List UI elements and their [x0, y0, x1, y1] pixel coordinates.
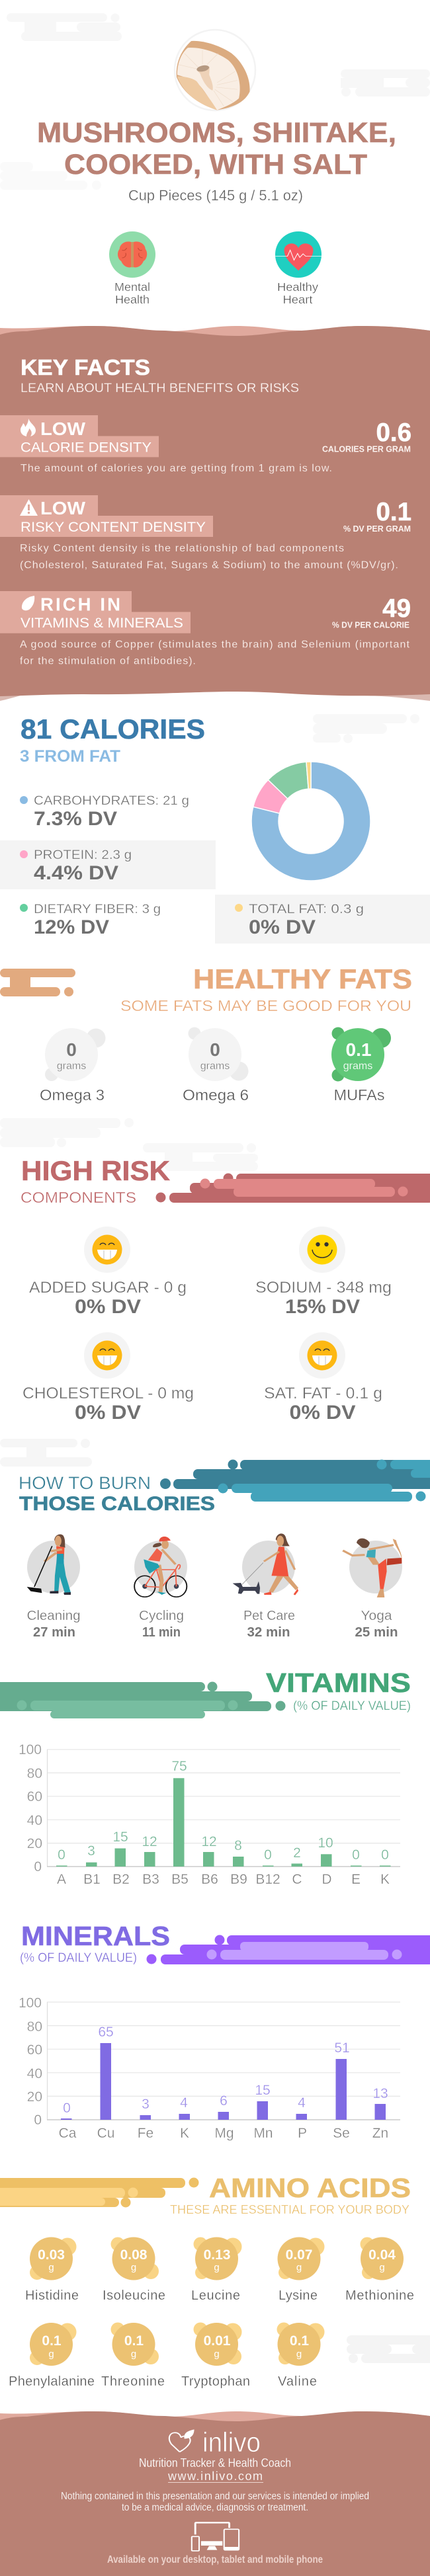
amino: phenylalanine: 0.1	[42, 2333, 62, 2349]
burn calories heading	[19, 1473, 215, 1515]
fact: risky content density: 0.1	[376, 498, 411, 526]
figure: person sweeping	[27, 1535, 71, 1595]
amino: histidine: 0.03	[38, 2247, 65, 2263]
bar chart: vitamins: B9	[230, 1872, 247, 1887]
fact: calorie density: CALORIE DENSITY	[21, 440, 151, 455]
risk: sodium: SODIUM - 348 mg	[255, 1279, 392, 1297]
activity: yoga	[343, 1539, 402, 1640]
icon: grinning face	[93, 1235, 122, 1264]
fat: omega 6	[183, 1027, 249, 1104]
minerals subheading: (% OF DAILY VALUE)	[20, 1951, 137, 1965]
bar chart: minerals	[19, 1995, 400, 2141]
decorative cloud: healthy fats	[0, 969, 75, 996]
bar chart: minerals: Zn	[372, 2126, 388, 2141]
risk: saturated fat: SAT. FAT - 0.1 g	[264, 1385, 382, 1402]
activity: pet care	[233, 1533, 298, 1640]
fat: omega 6: grams	[200, 1061, 230, 1072]
bar chart: minerals: 40	[27, 2066, 42, 2081]
amino: leucine: g	[214, 2262, 220, 2273]
icon: grinning face	[93, 1341, 122, 1370]
fat: omega 3: grams	[57, 1061, 86, 1072]
amino: valine	[277, 2322, 324, 2389]
logo: inlivo: inlivo	[202, 2427, 261, 2458]
bar chart: vitamins: D	[322, 1872, 332, 1887]
activity: cycling	[134, 1537, 187, 1640]
key facts subheading: LEARN ABOUT HEALTH BENEFITS OR RISKS	[21, 382, 299, 395]
amino: histidine: Histidine	[25, 2288, 79, 2303]
amino: isoleucine: 0.08	[120, 2247, 148, 2263]
activity: pet care: Pet Care	[243, 1609, 295, 1623]
amino: leucine: 0.13	[204, 2247, 230, 2263]
amino: phenylalanine: Phenylalanine	[9, 2374, 95, 2389]
macro: protein: 4.4% DV	[34, 862, 118, 884]
disclaimer: Nothing contained in this presentation and our services is intended or implied	[61, 2491, 369, 2502]
fat: omega 3: Omega 3	[40, 1086, 105, 1104]
amino: histidine	[25, 2237, 79, 2303]
amino: lysine	[278, 2237, 324, 2303]
bar chart: vitamins: 20	[27, 1836, 42, 1851]
amino: lysine: Lysine	[279, 2288, 318, 2303]
icon: leaf	[22, 596, 34, 610]
amino: valine: Valine	[278, 2374, 317, 2389]
bar chart: minerals: P	[298, 2126, 307, 2141]
amino acids subheading: THESE ARE ESSENTIAL FOR YOUR BODY	[170, 2203, 409, 2216]
legend band backgrounds	[0, 840, 430, 944]
amino: leucine	[191, 2237, 242, 2303]
risk: sodium	[255, 1227, 392, 1318]
fat: mufas	[331, 1027, 391, 1104]
risk: cholesterol: CHOLESTEROL - 0 mg	[22, 1385, 194, 1402]
fact: risky content density: % DV PER GRAM	[343, 524, 411, 534]
fact: rich in vitamins and minerals: A good source of Copper (stimulates the brain) and Selenium (important	[20, 639, 410, 651]
fact: risky content density	[0, 495, 411, 571]
bar chart: minerals: Ca	[59, 2126, 77, 2141]
amino: phenylalanine	[9, 2323, 95, 2389]
bar chart: vitamins: B5	[171, 1872, 189, 1887]
fact: risky content density: Risky Content density is the relationship of bad components	[20, 543, 344, 554]
amino: methionine: g	[379, 2262, 385, 2273]
activity: cleaning: 27 min	[33, 1625, 75, 1640]
activity: yoga: 25 min	[355, 1625, 398, 1640]
fact: rich in vitamins and minerals: RICH IN	[40, 594, 120, 615]
vitamins subheading: (% OF DAILY VALUE)	[293, 1699, 411, 1713]
panel: footer	[0, 2411, 430, 2576]
amino: lysine: 0.07	[286, 2247, 312, 2263]
vitamins heading: VITAMINS	[266, 1668, 411, 1698]
bar chart: vitamins: 75	[171, 1759, 187, 1774]
label: mental health: Mental	[114, 280, 150, 294]
amino: leucine: Leucine	[191, 2288, 240, 2303]
macro: total fat: 0% DV	[249, 916, 316, 938]
healthy fats subheading: SOME FATS MAY BE GOOD FOR YOU	[120, 997, 411, 1014]
tagline: Nutrition Tracker & Health Coach	[139, 2456, 291, 2470]
macro: dietary fiber: DIETARY FIBER: 3 g	[34, 902, 161, 916]
bar chart: vitamins: 0	[264, 1847, 272, 1863]
bar chart: vitamins: 0	[352, 1847, 360, 1863]
bar chart: minerals: 51	[334, 2040, 350, 2056]
icon: smiling face	[307, 1235, 337, 1264]
food photo: shiitake mushroom	[175, 30, 255, 110]
bar chart: vitamins: 100	[19, 1742, 42, 1757]
amino: isoleucine: Isoleucine	[103, 2288, 165, 2303]
amino: tryptophan: g	[214, 2349, 220, 2360]
activity: cycling: Cycling	[139, 1609, 184, 1623]
macro: protein	[20, 848, 132, 884]
bar chart: vitamins: A	[57, 1872, 66, 1887]
bar chart: minerals: 0	[34, 2113, 42, 2128]
fat: mufas: grams	[343, 1061, 372, 1072]
amino: threonine: Threonine	[101, 2374, 165, 2389]
bar chart: vitamins: K	[380, 1872, 390, 1887]
bar chart: vitamins: E	[351, 1872, 361, 1887]
bar chart: vitamins: 80	[27, 1766, 42, 1781]
macro: carbohydrates: 7.3% DV	[34, 808, 117, 830]
donut chart: calorie sources	[251, 762, 370, 881]
bar chart: vitamins: 10	[318, 1835, 333, 1851]
panel: key facts	[0, 326, 430, 701]
amino: phenylalanine: g	[48, 2349, 54, 2360]
amino: tryptophan	[181, 2322, 250, 2389]
activity: cycling: 11 min	[142, 1625, 181, 1640]
figure: person in dancer pose	[343, 1539, 402, 1597]
bar chart: minerals: 13	[372, 2086, 388, 2101]
bar chart: vitamins	[19, 1742, 400, 1887]
icon: devices	[192, 2522, 239, 2551]
macro: dietary fiber	[20, 902, 161, 938]
macro: protein: PROTEIN: 2.3 g	[34, 848, 132, 862]
risk: cholesterol: 0% DV	[75, 1402, 141, 1424]
bar chart: minerals: 100	[19, 1995, 42, 2011]
risk: sodium: 15% DV	[285, 1296, 360, 1318]
bar chart: minerals: 4	[298, 2095, 306, 2111]
availability note: Available on your desktop, tablet and mobile phone	[107, 2554, 323, 2565]
amino: isoleucine: g	[131, 2262, 136, 2273]
amino: threonine: 0.1	[124, 2333, 144, 2349]
fat: mufas: MUFAs	[333, 1086, 385, 1104]
fact: rich in vitamins and minerals: VITAMINS & MINERALS	[21, 616, 183, 631]
macro: carbohydrates	[20, 793, 189, 830]
bar chart: minerals: Mn	[253, 2126, 273, 2141]
risk: saturated fat: 0% DV	[290, 1402, 356, 1424]
decorative cloud: amino acids	[0, 2178, 198, 2207]
bar chart: vitamins: 0	[34, 1859, 42, 1874]
amino: valine: 0.1	[290, 2333, 309, 2349]
title: COOKED, WITH SALT	[64, 149, 367, 181]
burn calories heading: THOSE CALORIES	[19, 1493, 215, 1515]
bar chart: vitamins: 15	[112, 1830, 128, 1845]
fact: rich in vitamins and minerals: 49	[382, 594, 411, 623]
label: mental health: Health	[115, 293, 150, 306]
decorative cloud: vitamins	[0, 1682, 286, 1718]
burn calories heading: HOW TO BURN	[19, 1473, 151, 1493]
icon: healthy heart	[275, 231, 322, 278]
bar chart: vitamins: C	[292, 1872, 302, 1887]
fact: rich in vitamins and minerals: % DV PER CALORIE	[332, 620, 409, 629]
icon: grinning face	[307, 1341, 337, 1370]
calories heading: 81 CALORIES	[21, 713, 205, 745]
decorative cloud: minerals	[147, 1935, 430, 1964]
amino: threonine	[101, 2322, 165, 2389]
title	[37, 117, 396, 181]
macro: dietary fiber: 12% DV	[34, 916, 109, 938]
amino: tryptophan: 0.01	[204, 2333, 231, 2349]
bar chart: vitamins: 0	[381, 1847, 389, 1863]
amino: threonine: g	[131, 2349, 136, 2360]
bar chart: vitamins: B3	[142, 1872, 159, 1887]
bar chart: minerals: 80	[27, 2019, 42, 2034]
macro: total fat	[235, 902, 364, 938]
fact: calorie density: The amount of calories you are getting from 1 gram is low.	[21, 463, 332, 474]
bar chart: vitamins: B1	[83, 1872, 101, 1887]
fat: omega 3	[40, 1028, 106, 1104]
activity: pet care: 32 min	[247, 1625, 290, 1640]
bar chart: vitamins: 12	[142, 1834, 157, 1849]
serving size: Cup Pieces (145 g / 5.1 oz)	[128, 187, 303, 204]
label: mental health	[114, 280, 150, 306]
figure: person walking dog	[233, 1533, 298, 1595]
fat: mufas: 0.1	[346, 1039, 371, 1060]
activity: cleaning: Cleaning	[26, 1609, 81, 1623]
healthy fats heading: HEALTHY FATS	[193, 963, 412, 994]
bar chart: minerals: 6	[220, 2093, 228, 2109]
fact: risky content density: (Cholesterol, Saturated Fat, Sugars & Sodium) to the amount (%DV/gr).	[20, 559, 398, 571]
amino: valine: g	[296, 2349, 302, 2360]
fact: calorie density: LOW	[40, 419, 85, 439]
icon: flame	[21, 419, 36, 436]
amino: methionine: Methionine	[345, 2288, 414, 2303]
minerals heading: MINERALS	[21, 1921, 170, 1951]
bar chart: vitamins: 8	[234, 1838, 242, 1853]
bar chart: vitamins: 3	[87, 1843, 95, 1859]
bar chart: vitamins: 2	[293, 1845, 301, 1861]
bar chart: minerals: 3	[142, 2097, 150, 2112]
decorative cloud: high risk	[156, 1173, 430, 1203]
disclaimer: to be a medical advice, diagnosis or treatment.	[122, 2502, 308, 2513]
fact: calorie density: CALORIES PER GRAM	[322, 444, 411, 454]
risk: cholesterol	[22, 1332, 194, 1424]
decorative cloud: burn calories	[160, 1460, 430, 1502]
risk: saturated fat	[264, 1332, 382, 1424]
disclaimer	[61, 2491, 369, 2513]
bar chart: vitamins: 60	[27, 1789, 42, 1804]
bar chart: vitamins: 40	[27, 1813, 42, 1828]
fat: omega 6: 0	[210, 1039, 220, 1060]
amino: histidine: g	[48, 2262, 54, 2273]
icon: warning triangle	[20, 499, 38, 516]
fact: calorie density	[0, 415, 411, 474]
bar chart: vitamins: 0	[58, 1847, 65, 1863]
fat: omega 3: 0	[66, 1039, 77, 1060]
risk: added sugar: 0% DV	[75, 1296, 141, 1318]
activity: yoga: Yoga	[361, 1609, 392, 1623]
fat: omega 6: Omega 6	[183, 1086, 249, 1104]
bar chart: vitamins: B6	[201, 1872, 218, 1887]
title: MUSHROOMS, SHIITAKE,	[37, 117, 396, 149]
bar chart: minerals: 0	[63, 2101, 71, 2116]
macro: carbohydrates: CARBOHYDRATES: 21 g	[34, 793, 189, 808]
amino: isoleucine	[103, 2237, 165, 2303]
bar chart: minerals: 20	[27, 2089, 42, 2105]
icon: mental health	[109, 231, 155, 278]
bar chart: minerals: 15	[255, 2083, 271, 2098]
bar chart: minerals: Cu	[97, 2126, 114, 2141]
bar chart: minerals: Se	[333, 2126, 350, 2141]
bar chart: minerals: 60	[27, 2042, 42, 2058]
high risk subheading: COMPONENTS	[21, 1189, 136, 1206]
high risk heading: HIGH RISK	[21, 1155, 170, 1186]
calories from fat: 3 FROM FAT	[20, 748, 120, 766]
bar chart: vitamins: 12	[201, 1834, 217, 1849]
label: healthy heart	[277, 280, 318, 306]
bar chart: minerals: 4	[180, 2095, 188, 2111]
key facts heading: KEY FACTS	[21, 355, 150, 380]
figure: person cycling	[134, 1537, 187, 1597]
logo: inlivo	[169, 2427, 261, 2458]
amino: tryptophan: Tryptophan	[181, 2374, 250, 2389]
bar chart: vitamins: B2	[112, 1872, 130, 1887]
fact: risky content density: RISKY CONTENT DENSITY	[21, 520, 206, 535]
bar chart: minerals: Mg	[214, 2126, 234, 2141]
bar chart: minerals: 65	[98, 2025, 114, 2040]
amino acids heading: AMINO ACIDS	[209, 2173, 411, 2203]
risk: added sugar	[29, 1227, 187, 1318]
amino: lysine: g	[296, 2262, 302, 2273]
website link: www.inlivo.com	[167, 2470, 263, 2483]
activity: cleaning	[26, 1535, 81, 1640]
bar chart: vitamins: B12	[255, 1872, 280, 1887]
label: healthy heart: Healthy	[277, 280, 318, 294]
fact: rich in vitamins and minerals	[0, 591, 411, 667]
amino: methionine	[345, 2237, 414, 2303]
amino: methionine: 0.04	[368, 2247, 396, 2263]
bar chart: minerals: K	[180, 2126, 189, 2141]
label: healthy heart: Heart	[283, 293, 313, 306]
risk: added sugar: ADDED SUGAR - 0 g	[29, 1279, 187, 1297]
macro: total fat: TOTAL FAT: 0.3 g	[249, 902, 364, 916]
bar chart: minerals: Fe	[138, 2126, 153, 2141]
fact: risky content density: LOW	[40, 498, 85, 518]
fact: rich in vitamins and minerals: for the stimulation of antibodies).	[20, 656, 196, 667]
fact: calorie density: 0.6	[376, 419, 411, 447]
